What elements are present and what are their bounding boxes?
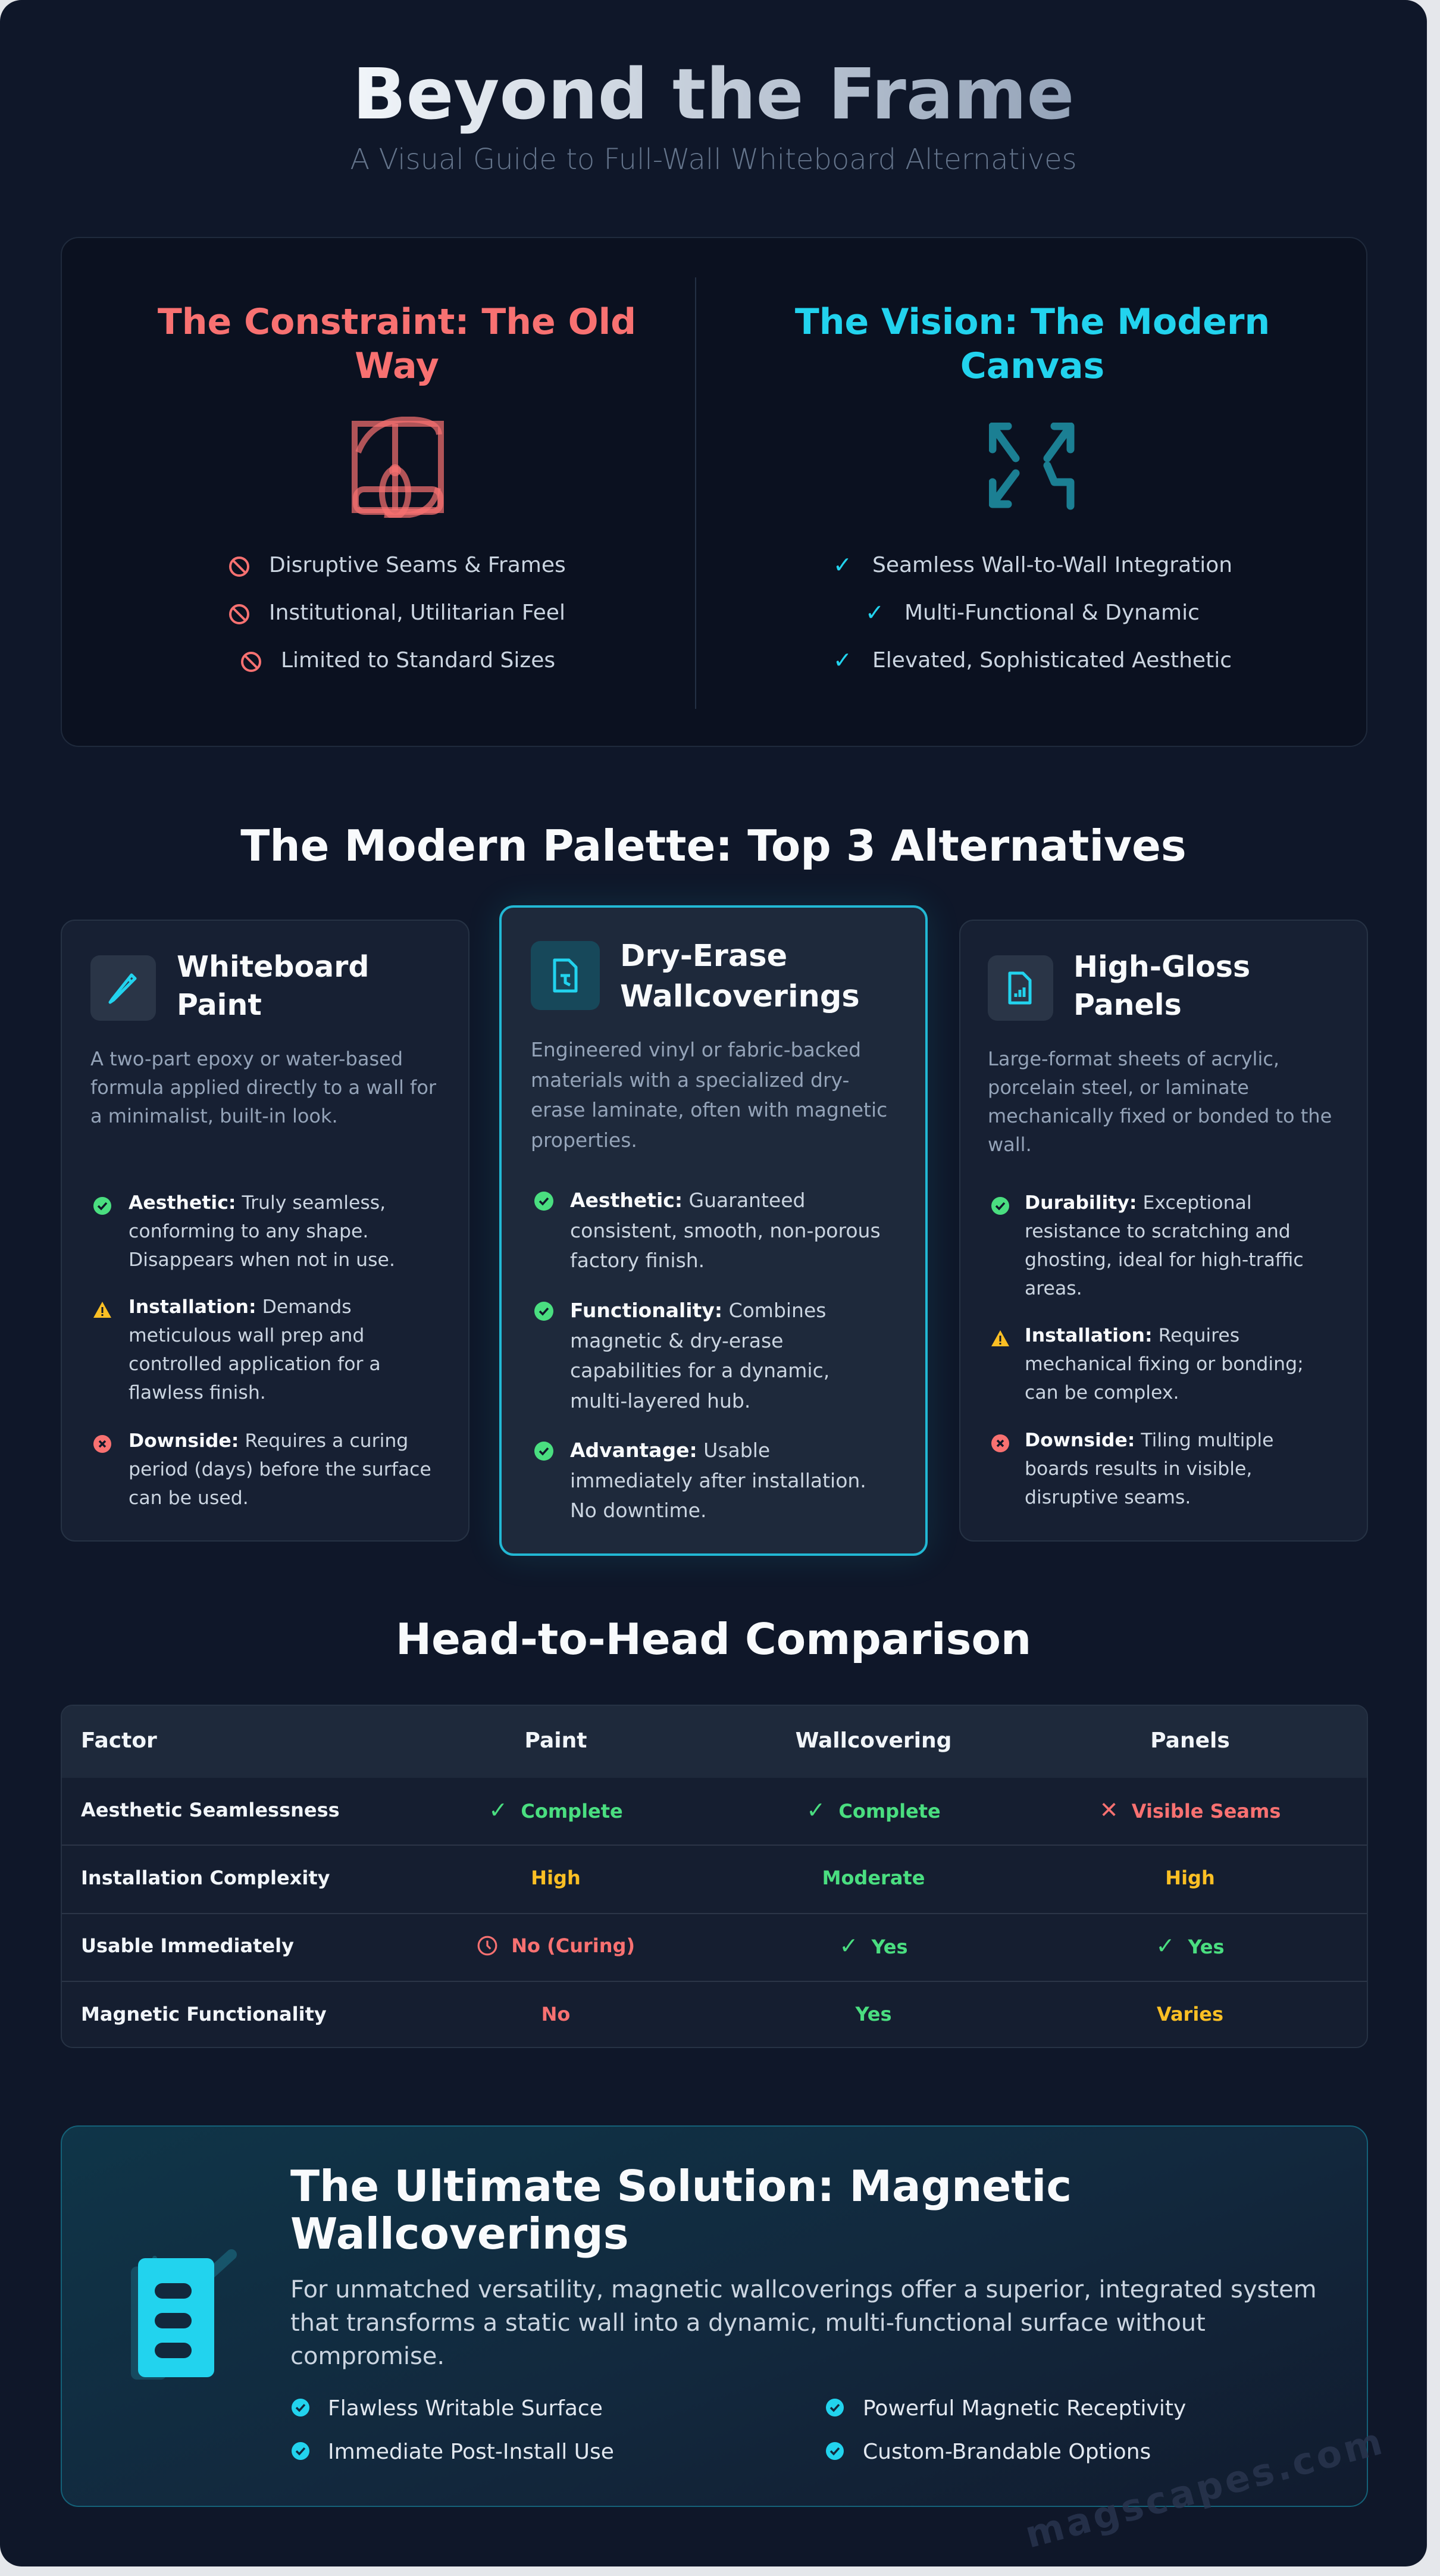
callout bullets bbox=[292, 2396, 1186, 2464]
row: magnetic functionality: No bbox=[541, 2003, 570, 2025]
row: aesthetic seamlessness: ✕ Visible Seams bbox=[1100, 1797, 1281, 1823]
heading: vision bbox=[795, 301, 1270, 387]
description: erase laminate, often with magnetic bbox=[531, 1098, 887, 1121]
row: magnetic functionality bbox=[81, 2003, 1223, 2025]
description: formula applied directly to a wall for bbox=[90, 1076, 436, 1099]
row: installation complexity: Moderate bbox=[822, 1867, 925, 1889]
list: constraint points: Limited to Standard Sizes bbox=[281, 648, 555, 673]
description: porcelain steel, or laminate bbox=[988, 1076, 1249, 1099]
list: constraint points: Institutional, Utilitarian Feel bbox=[269, 601, 565, 625]
callout paragraph: that transforms a static wall into a dynamic, multi-functional surface without bbox=[290, 2309, 1206, 2337]
callout title: Wallcoverings bbox=[290, 2209, 629, 2259]
icon: magnetic board bbox=[131, 2249, 237, 2380]
list: vision points: ✓ bbox=[833, 647, 852, 673]
description: mechanically fixed or bonded to the bbox=[988, 1105, 1332, 1127]
description bbox=[988, 1048, 1332, 1156]
table header: Factor bbox=[81, 1728, 157, 1753]
row: installation complexity bbox=[81, 1867, 1215, 1889]
table header: Paint bbox=[525, 1728, 587, 1753]
card: dry-erase wallcoverings (highlighted) bbox=[499, 905, 928, 1556]
section heading: alternatives: The Modern Palette: Top 3 Alternatives bbox=[240, 821, 1187, 871]
list: vision points: Elevated, Sophisticated Aesthetic bbox=[872, 648, 1232, 673]
bullets: Downside: Tiling multiple bbox=[1025, 1430, 1274, 1451]
callout paragraph bbox=[290, 2276, 1317, 2370]
card title bbox=[177, 950, 369, 1022]
card title: High-Gloss bbox=[1073, 950, 1250, 984]
heading: constraint: Way bbox=[355, 345, 439, 387]
callout: ultimate solution bbox=[61, 2125, 1368, 2507]
description: properties. bbox=[531, 1128, 637, 1151]
list: vision points bbox=[833, 552, 1232, 673]
card title: Wallcoverings bbox=[620, 979, 860, 1014]
bullets: Installation: Demands bbox=[129, 1296, 352, 1318]
table header: Wallcovering bbox=[796, 1728, 951, 1753]
bullets: conforming to any shape. bbox=[129, 1221, 368, 1242]
row: usable immediately bbox=[81, 1933, 1225, 1959]
icon: expand arrows bbox=[989, 423, 1075, 509]
callout bullets: Powerful Magnetic Receptivity bbox=[863, 2396, 1186, 2421]
callout title: The Ultimate Solution: Magnetic bbox=[290, 2161, 1072, 2211]
callout bullets: Flawless Writable Surface bbox=[328, 2396, 603, 2421]
panel: constraint vs vision bbox=[61, 237, 1367, 747]
description: wall. bbox=[988, 1133, 1032, 1156]
description: A two-part epoxy or water-based bbox=[90, 1048, 403, 1070]
callout title bbox=[290, 2161, 1072, 2259]
card title: Panels bbox=[1073, 988, 1182, 1022]
bullets: immediately after installation. bbox=[570, 1469, 866, 1492]
bullets: Installation: Requires bbox=[1025, 1325, 1239, 1346]
bullets: can be used. bbox=[129, 1487, 249, 1509]
card: whiteboard paint bbox=[61, 920, 469, 1542]
bullets: consistent, smooth, non-porous bbox=[570, 1219, 881, 1242]
list: vision points: ✓ bbox=[865, 599, 884, 626]
row: aesthetic seamlessness: Aesthetic Seamlessness bbox=[81, 1799, 340, 1821]
list: constraint points: Disruptive Seams & Frames bbox=[269, 553, 566, 577]
bullets: disruptive seams. bbox=[1025, 1487, 1191, 1508]
heading: vision: Canvas bbox=[960, 345, 1104, 387]
row: aesthetic seamlessness: ✓ Complete bbox=[806, 1797, 941, 1823]
callout paragraph: compromise. bbox=[290, 2343, 444, 2370]
card title bbox=[1073, 950, 1250, 1022]
bullets: Advantage: Usable bbox=[570, 1439, 770, 1462]
row: magnetic functionality: Varies bbox=[1157, 2003, 1223, 2025]
bullets: period (days) before the surface bbox=[129, 1459, 431, 1480]
bullets: Aesthetic: Guaranteed bbox=[570, 1189, 805, 1212]
row: magnetic functionality: Magnetic Functionality bbox=[81, 2003, 327, 2025]
icon: pencil bbox=[90, 955, 156, 1021]
row: installation complexity: High bbox=[531, 1867, 581, 1889]
row: usable immediately: ✓ Yes bbox=[839, 1933, 908, 1959]
bullets: multi-layered hub. bbox=[570, 1389, 750, 1412]
bullets: No downtime. bbox=[570, 1499, 706, 1522]
icon: broken frame bbox=[352, 417, 444, 518]
bullets: resistance to scratching and bbox=[1025, 1221, 1291, 1242]
bullets: factory finish. bbox=[570, 1249, 705, 1272]
card: high-gloss panels bbox=[959, 920, 1368, 1542]
bullets: Durability: Exceptional bbox=[1025, 1192, 1252, 1214]
callout bullets: Immediate Post-Install Use bbox=[328, 2440, 614, 2464]
bullets bbox=[93, 1192, 431, 1509]
row: usable immediately: ✓ Yes bbox=[1156, 1933, 1225, 1959]
comparison table bbox=[61, 1705, 1368, 2048]
row: installation complexity: High bbox=[1165, 1867, 1215, 1889]
description bbox=[531, 1038, 887, 1151]
bullets: controlled application for a bbox=[129, 1353, 381, 1375]
bullets bbox=[534, 1189, 881, 1522]
bullets: Downside: Requires a curing bbox=[129, 1430, 408, 1452]
card title: Paint bbox=[177, 988, 262, 1022]
bullets: meticulous wall prep and bbox=[129, 1325, 364, 1346]
row: installation complexity: Installation Complexity bbox=[81, 1867, 330, 1889]
callout bullets: Custom-Brandable Options bbox=[863, 2440, 1151, 2464]
section heading: comparison: Head-to-Head Comparison bbox=[396, 1614, 1031, 1664]
description bbox=[90, 1048, 436, 1127]
bullets: Aesthetic: Truly seamless, bbox=[129, 1192, 386, 1214]
heading: constraint: The Constraint: The Old bbox=[158, 301, 636, 343]
table header: Panels bbox=[1150, 1728, 1230, 1753]
card title: Whiteboard bbox=[177, 950, 369, 984]
row: magnetic functionality: Yes bbox=[856, 2003, 891, 2025]
row: usable immediately: Usable Immediately bbox=[81, 1934, 294, 1957]
icon: document bbox=[531, 941, 600, 1010]
bullets: can be complex. bbox=[1025, 1382, 1179, 1403]
bullets: ghosting, ideal for high-traffic bbox=[1025, 1249, 1304, 1271]
description: a minimalist, built-in look. bbox=[90, 1105, 338, 1127]
watermark: magscapes.com bbox=[1020, 2419, 1389, 2557]
subtitle: A Visual Guide to Full-Wall Whiteboard Alternatives bbox=[350, 143, 1077, 176]
table header bbox=[81, 1728, 1230, 1753]
bullets: capabilities for a dynamic, bbox=[570, 1359, 829, 1382]
description: Engineered vinyl or fabric-backed bbox=[531, 1038, 861, 1061]
callout paragraph: For unmatched versatility, magnetic wallcoverings offer a superior, integrated system bbox=[290, 2276, 1317, 2303]
heading: vision: The Vision: The Modern bbox=[795, 301, 1270, 343]
list: vision points: Multi-Functional & Dynamic bbox=[904, 601, 1200, 625]
bullets bbox=[991, 1192, 1304, 1508]
bullets: mechanical fixing or bonding; bbox=[1025, 1353, 1304, 1375]
title: Beyond the Frame bbox=[353, 53, 1074, 135]
icon: chart document bbox=[988, 955, 1053, 1021]
card title bbox=[620, 939, 860, 1014]
bullets: boards results in visible, bbox=[1025, 1458, 1252, 1480]
description: Large-format sheets of acrylic, bbox=[988, 1048, 1279, 1070]
row: aesthetic seamlessness: ✓ Complete bbox=[489, 1797, 623, 1823]
bullets: Disappears when not in use. bbox=[129, 1249, 395, 1271]
bullets: areas. bbox=[1025, 1278, 1082, 1299]
row: aesthetic seamlessness bbox=[81, 1797, 1281, 1823]
list: vision points: ✓ bbox=[833, 552, 852, 578]
list: vision points: Seamless Wall-to-Wall Integration bbox=[872, 553, 1232, 577]
description: materials with a specialized dry- bbox=[531, 1068, 849, 1092]
row: usable immediately: No (Curing) bbox=[511, 1934, 635, 1957]
card title: Dry-Erase bbox=[620, 939, 787, 974]
bullets: Functionality: Combines bbox=[570, 1299, 826, 1322]
bullets: flawless finish. bbox=[129, 1382, 266, 1403]
list: constraint points bbox=[229, 553, 566, 673]
heading: constraint bbox=[158, 301, 636, 387]
bullets: magnetic & dry-erase bbox=[570, 1328, 783, 1352]
